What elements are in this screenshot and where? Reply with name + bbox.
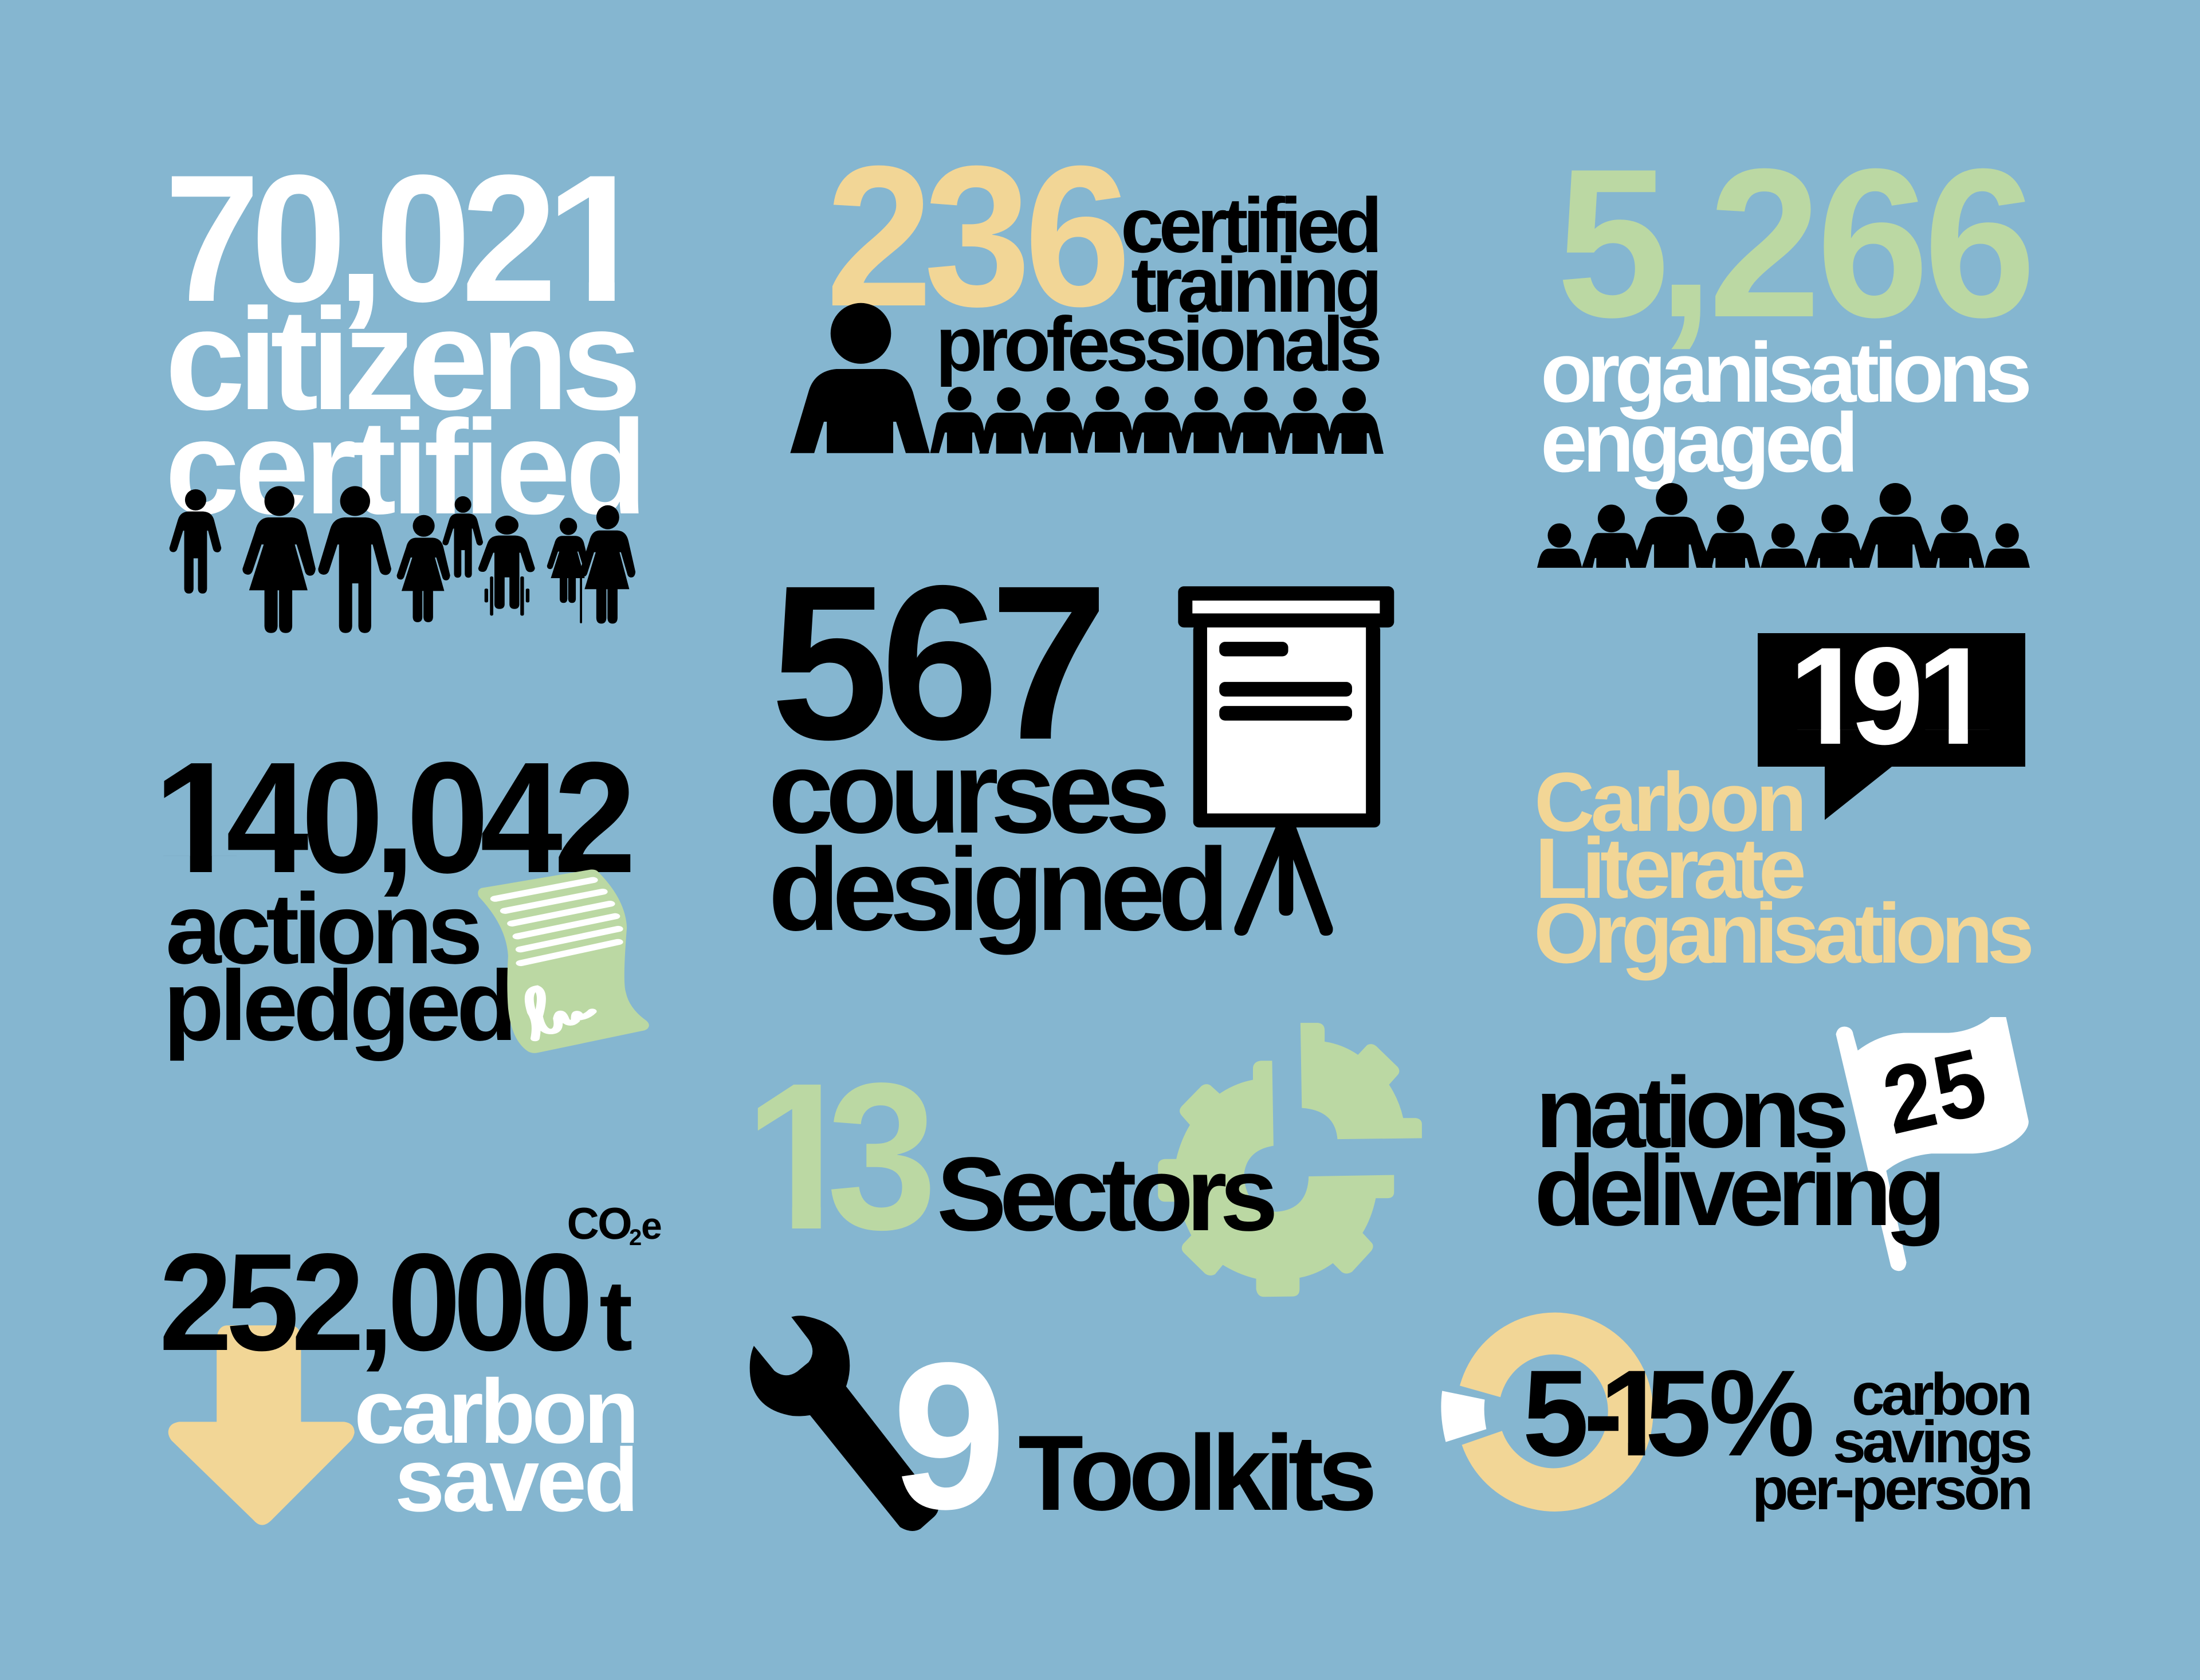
label: Carbon: Carbon xyxy=(1534,755,1807,849)
panel: Carbon Literate Organisations xyxy=(1534,619,2034,981)
label: Toolkits: Toolkits xyxy=(1018,1413,1377,1533)
label: carbon: carbon xyxy=(1852,1361,2033,1428)
panel: carbon savings per-person xyxy=(1441,1313,2033,1522)
label: Organisations: Organisations xyxy=(1534,886,2034,981)
label: Sectors: Sectors xyxy=(937,1135,1278,1253)
callout: speech bubble xyxy=(1758,633,2025,820)
unit: CO2e: 2 xyxy=(629,1225,642,1250)
unit: t: t xyxy=(599,1260,632,1372)
number: 13: 1 xyxy=(744,1040,859,1274)
icon: donut gauge xyxy=(1441,1313,1653,1512)
panel: nations delivering xyxy=(1534,1017,2029,1271)
label: nations: nations xyxy=(1535,1057,1849,1169)
panel: carbon saved xyxy=(159,1198,662,1530)
icon: cut-away gear xyxy=(1158,1023,1422,1297)
number: 70,021 xyxy=(172,174,615,329)
number: 140,042: 1 xyxy=(154,730,241,907)
number: 567: 567 xyxy=(771,540,1108,786)
label: certified: certified xyxy=(165,392,647,542)
number: 191: 1 xyxy=(1789,619,1866,774)
label: actions: actions xyxy=(166,873,483,985)
number: 5-15% xyxy=(1526,1370,1812,1457)
icon: flag xyxy=(1836,1017,2029,1271)
number: 191: 1 xyxy=(1916,619,1994,774)
icon: row of people xyxy=(1537,483,2030,568)
panel: citizens certified xyxy=(170,174,639,633)
number: 5-15%: 1 xyxy=(1600,1345,1668,1482)
panel: certified training professionals xyxy=(790,124,1384,454)
icon: group of people xyxy=(170,486,635,633)
label: certified: certified xyxy=(1121,182,1382,269)
number: 70,021: 1 xyxy=(545,138,649,341)
number: 13: 3 xyxy=(827,1040,937,1273)
label: Literate: Literate xyxy=(1535,820,1806,916)
number: 236: 236 xyxy=(826,124,1131,348)
number: 5,266: 5,266 xyxy=(1557,125,2036,362)
icon: wrench xyxy=(750,1316,938,1531)
number: 252,000: 252,000 xyxy=(159,1225,594,1380)
label: engaged: engaged xyxy=(1541,396,1859,490)
icon: presentation board xyxy=(1178,586,1394,936)
label: professionals: professionals xyxy=(936,301,1382,387)
number: 13 xyxy=(757,1082,930,1231)
icon: signed pledge document xyxy=(478,870,649,1053)
panel: sectors xyxy=(744,1023,1422,1297)
label: organisations: organisations xyxy=(1541,325,2032,420)
label: pledged: pledged xyxy=(163,949,517,1061)
number: 25: 25 xyxy=(1873,1029,1998,1155)
panel: organisations engaged xyxy=(1537,125,2036,568)
number: 140,042 xyxy=(163,762,630,897)
label: savings: savings xyxy=(1833,1409,2033,1475)
number: 5-15%: 5% xyxy=(1645,1345,1815,1482)
label: citizens: citizens xyxy=(165,279,642,440)
label: training: training xyxy=(1131,241,1382,328)
label: designed: designed xyxy=(768,824,1229,955)
number: 9: 9 xyxy=(892,1320,1006,1553)
number: 140,042: 40,042 xyxy=(226,729,637,906)
number: 5-15%: 5- xyxy=(1522,1345,1623,1482)
panel: courses designed xyxy=(768,540,1394,955)
unit: CO2e: e xyxy=(641,1204,662,1247)
number: 191 xyxy=(1797,647,1990,745)
icon: down arrow xyxy=(168,1325,355,1525)
panel: toolkits xyxy=(750,1316,1377,1553)
label: delivering: delivering xyxy=(1534,1135,1946,1247)
unit: CO2e: CO xyxy=(567,1198,632,1249)
label: per-person: per-person xyxy=(1752,1456,2033,1522)
label: saved: saved xyxy=(395,1430,639,1530)
number: 70,021: 70,02 xyxy=(164,137,557,339)
icon: trainer and audience xyxy=(790,303,1384,454)
label: courses: courses xyxy=(768,727,1170,858)
number: 191: 9 xyxy=(1851,619,1924,774)
label: carbon: carbon xyxy=(354,1360,639,1462)
panel: actions pledged xyxy=(163,762,649,1061)
unit: CO2e xyxy=(567,1198,662,1250)
